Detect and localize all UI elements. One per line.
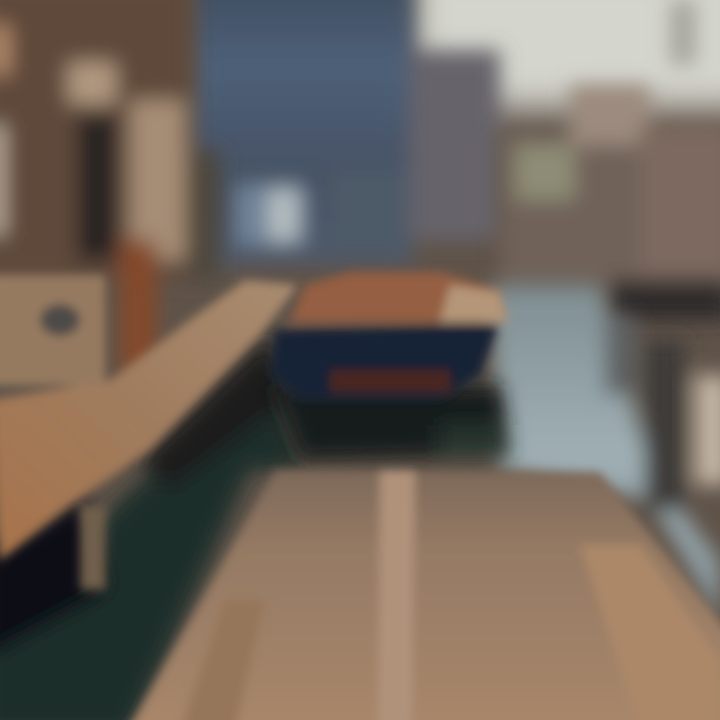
- boat deck: [290, 272, 508, 322]
- dark green water, lower left: [0, 335, 300, 720]
- distant trees and buildings on the right: [500, 0, 720, 320]
- boat: [270, 272, 508, 400]
- water channel on the right: [490, 285, 720, 620]
- boat hull: [270, 325, 498, 400]
- left building: [0, 0, 220, 375]
- foreground wooden dock: [125, 470, 720, 720]
- tower building, blue-grey: [195, 0, 500, 265]
- sky: [410, 0, 720, 110]
- left wooden pier: [0, 275, 298, 590]
- boat shadow on the water: [270, 385, 510, 460]
